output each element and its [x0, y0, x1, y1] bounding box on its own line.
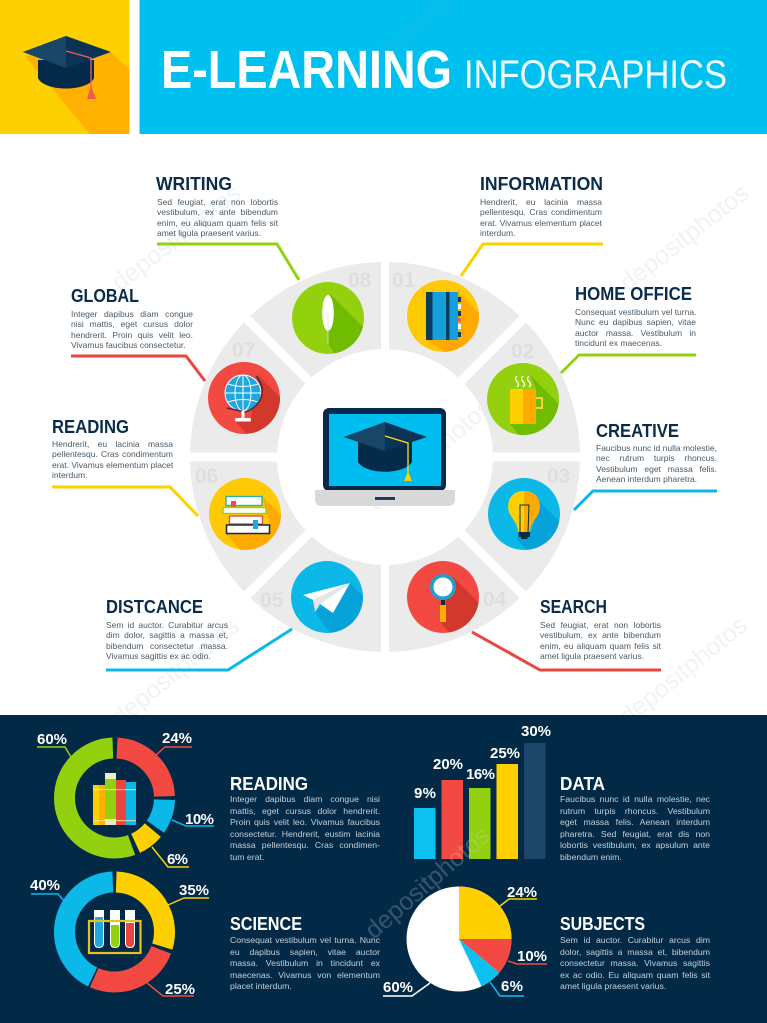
- callout: global: GLOBAL: [71, 286, 139, 306]
- bar chart: data: 30%: [521, 723, 551, 740]
- icon: test tubes: [89, 910, 140, 953]
- callout: search: vestibulum, ex ante bibendum: [540, 630, 661, 640]
- callout: distcance: Sem id auctor. Curabitur arcus: [106, 620, 228, 630]
- callout: global: hendrerit. Proin quis velit leo.: [71, 330, 193, 340]
- labels: 24%: [162, 730, 192, 747]
- pie chart: subjects: 24%: [507, 884, 537, 901]
- text block: reading: Proin quis velit leo. Vivamus faucibus: [230, 817, 380, 827]
- watermarks: depositphotos: [106, 179, 246, 297]
- callout: writing: WRITING: [156, 174, 232, 194]
- text block: data: [560, 774, 710, 866]
- callout: global: nisi mattis, eget cursus dolor: [71, 319, 193, 329]
- text block: subjects: consectetur massa. Vivamus sagittis: [560, 958, 710, 968]
- text block: data: Faucibus nunc id nulla molestie, nec: [560, 794, 710, 804]
- icon: books: [93, 773, 136, 825]
- callout: writing: Sed feugiat, erat non lobortis: [157, 197, 278, 207]
- callout: creative: Aenean interdum pharetra.: [596, 474, 697, 484]
- callout: search: Sed feugiat, erat non lobortis: [540, 620, 661, 630]
- header blue title band: E-LEARNING: [161, 40, 452, 100]
- bar chart: data: 9%: [414, 785, 436, 802]
- callout: reading: erat. Vivamus elementum placet: [52, 460, 173, 470]
- icon: light bulb (03): [488, 478, 560, 550]
- callout: global: Vivamus faucibus consectetur.: [71, 340, 186, 350]
- text block: science: eu dapibus sapien, vitae auctor: [230, 946, 380, 956]
- callout: search: amet ligula praesent varius.: [540, 651, 644, 661]
- callout: reading: Hendrerit, eu lacinia massa: [52, 439, 173, 449]
- callout: writing: enim, eu aliquam quam felis sit: [157, 218, 278, 228]
- callout: home office: auctor massa. Vestibulum in: [575, 328, 696, 338]
- circular ring of eight segments: [178, 250, 592, 664]
- circular ring of eight segments: 03: [547, 465, 570, 488]
- callout: reading: READING: [52, 417, 129, 437]
- callout: search: enim, eu aliquam quam felis sit: [540, 641, 661, 651]
- callout: creative: Vestibulum eget massa felis.: [596, 464, 717, 474]
- callout: distcance: dim dolor, sagittis a massa et,: [106, 630, 228, 640]
- icon: coffee mug (02): [487, 363, 559, 435]
- watermarks: depositphotos: [106, 612, 245, 732]
- bar chart: data: [414, 723, 551, 859]
- callout: distcance: Vivamus sagittis ex ac odio.: [106, 651, 211, 661]
- callout: home office: [561, 284, 696, 373]
- callout: distcance: DISTCANCE: [106, 597, 203, 617]
- callout: home office: tincidunt ex maecenas.: [575, 338, 662, 348]
- icon: notebook (01): [407, 280, 479, 352]
- header blue title band: [140, 0, 767, 134]
- callout: creative: [574, 421, 717, 510]
- text block: data: lobortis vestibulum, ex apsulum ante: [560, 840, 710, 850]
- callout: creative: CREATIVE: [596, 421, 679, 441]
- watermarks: [106, 0, 754, 732]
- text block: reading: [230, 774, 380, 866]
- circular ring of eight segments: 07: [232, 339, 255, 362]
- labels: 40%: [30, 877, 60, 894]
- labels: 25%: [165, 981, 195, 998]
- watermarks: depositphotos: [614, 611, 753, 731]
- text block: subjects: amet ligula praesent varius.: [560, 981, 666, 991]
- donut chart: science: [30, 877, 209, 998]
- circular ring of eight segments: 02: [511, 340, 534, 363]
- callout: writing: vestibulum, ex ante bibendum: [157, 207, 278, 217]
- pie chart: subjects: 6%: [501, 978, 523, 995]
- labels: 10%: [185, 811, 214, 828]
- header blue title band: INFOGRAPHICS: [464, 53, 727, 97]
- labels: 6%: [167, 851, 188, 868]
- circular ring of eight segments: 08: [348, 269, 372, 292]
- labels: 35%: [179, 882, 209, 899]
- icon: globe (07): [208, 362, 280, 434]
- callout: search: SEARCH: [540, 597, 607, 617]
- callout: home office: HOME OFFICE: [575, 284, 692, 304]
- pie chart: subjects: [383, 884, 547, 996]
- text block: data: DATA: [560, 774, 605, 794]
- circular ring of eight segments: 04: [483, 588, 507, 611]
- callout: information: pellentesqu. Cras condimentum: [480, 207, 602, 217]
- text block: subjects: dolor, sagittis a massa et, bibendum: [560, 946, 710, 956]
- circular ring of eight segments: 06: [195, 465, 218, 488]
- watermarks on dark panel: depositphotos: [360, 821, 495, 945]
- bar chart: data: 20%: [433, 756, 463, 773]
- panel: dark statistics section: [0, 715, 767, 1023]
- text block: data: rutrum turpis rhoncus. Vestibulum: [560, 806, 710, 816]
- text block: subjects: [560, 914, 710, 995]
- icon: laptop with graduation cap: [315, 408, 455, 506]
- icon: feather (08): [292, 282, 364, 354]
- text block: science: maecenas. Vivamus von elementum: [230, 970, 380, 980]
- callout: creative: nec rutrum turpis rhoncus.: [596, 453, 717, 463]
- callout: reading: pellentesqu. Cras condimentum: [52, 449, 173, 459]
- callout: information: interdum.: [480, 228, 515, 238]
- callout: global: Integer dapibus diam congue: [71, 309, 193, 319]
- callout: global: [71, 286, 205, 381]
- callout: information: [461, 174, 603, 276]
- header yellow tile with graduation cap: [0, 0, 130, 134]
- callout: information: Hendrerit, eu lacinia massa: [480, 197, 602, 207]
- labels: [37, 730, 214, 868]
- text block: science: SCIENCE: [230, 914, 302, 934]
- icon: magnifying glass (04): [407, 561, 479, 633]
- text block: subjects: ex ac odio. Eu aliquam quam felis sit: [560, 970, 710, 980]
- callout: distcance: [106, 597, 292, 670]
- callout: home office: Nunc eu dapibus sapien, vitae: [575, 317, 696, 327]
- text block: reading: READING: [230, 774, 308, 794]
- callout: writing: [156, 174, 299, 280]
- callout: distcance: bibendum consectetur massa.: [106, 641, 228, 651]
- text block: science: Consequat vestibulum vel turna. Nunc: [230, 935, 380, 945]
- text block: science: [230, 914, 380, 995]
- header: [0, 0, 767, 134]
- text block: science: placet interdum.: [230, 981, 292, 991]
- circular ring of eight segments: 01: [392, 269, 416, 292]
- watermarks: depositphotos: [614, 179, 754, 297]
- callout: creative: Faucibus nunc id nulla molestie,: [596, 443, 717, 453]
- pie chart: subjects: 60%: [383, 979, 413, 996]
- icon: paper plane (05): [291, 561, 363, 633]
- callout: information: INFORMATION: [480, 174, 603, 194]
- text block: science: massa. Vestibulum in tincidunt ex: [230, 958, 380, 968]
- icon: stack of books (06): [209, 478, 281, 550]
- callout: search: [472, 597, 661, 670]
- text block: data: bibendum enim.: [560, 852, 622, 862]
- labels: 60%: [37, 731, 67, 748]
- text block: reading: Integer dapibus diam congue nisi: [230, 794, 380, 804]
- bar chart: data: 25%: [490, 745, 520, 762]
- bar chart: data: 16%: [466, 766, 495, 783]
- callout: writing: amet ligula praesent varius.: [157, 228, 261, 238]
- text block: reading: massa pellentesqu. Cras condimen-: [230, 840, 380, 850]
- callout: home office: Consequat vestibulum vel turna.: [575, 307, 696, 317]
- circular ring of eight segments: 05: [260, 589, 284, 612]
- labels: [30, 877, 209, 998]
- text block: reading: consectetur. Hendrerit, eustim lacinia: [230, 828, 380, 838]
- text block: data: pharetra. Sed feugiat, erat dis non: [560, 828, 710, 838]
- pie chart: subjects: 10%: [517, 948, 547, 965]
- callout: information: erat. Vivamus elementum placet: [480, 218, 602, 228]
- callout: reading: [52, 417, 198, 516]
- watermarks: depositphotos: [362, 393, 497, 517]
- text block: reading: tum erat.: [230, 852, 264, 862]
- text block: data: eget massa felis. Aenean interdum: [560, 817, 710, 827]
- donut chart: reading: [37, 730, 214, 868]
- text block: subjects: Sem id auctor. Curabitur arcus dim: [560, 935, 710, 945]
- text block: reading: mattis, eget cursus dolor hendrerit.: [230, 806, 380, 816]
- text block: subjects: SUBJECTS: [560, 914, 645, 934]
- callout: reading: interdum.: [52, 470, 87, 480]
